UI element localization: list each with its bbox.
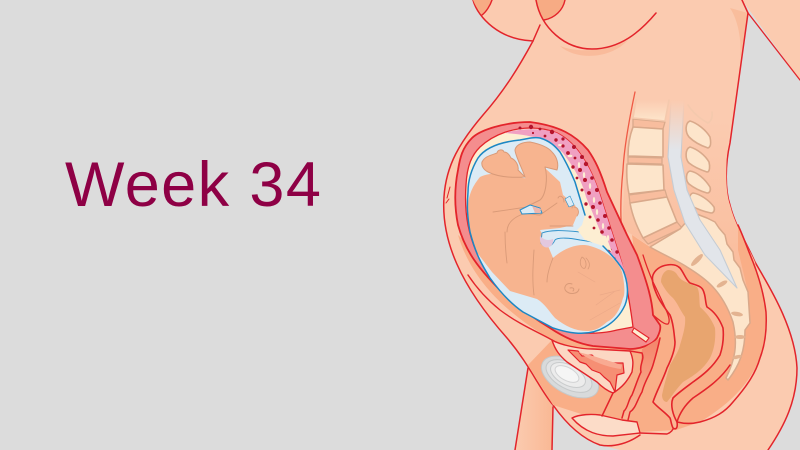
body silhouette [444,0,800,450]
abdominal wall band [458,235,600,350]
rectum [643,225,766,429]
uterus [455,122,660,349]
back shading [622,120,766,312]
spinal cord [668,100,737,288]
foot [482,150,525,177]
title: Week 34 [65,150,322,220]
thigh and upper foot [515,142,558,205]
bladder [552,340,633,416]
placenta pink band [505,129,625,272]
fluid pocket under arm [520,205,542,214]
sacrum [650,213,750,380]
uterine cavity (placenta base) [466,128,633,333]
amniotic membrane blue line [467,138,627,333]
torso and head [468,168,624,331]
discs [628,119,682,244]
spine [621,92,750,380]
ear [565,284,579,293]
sacral discs [690,253,746,360]
pelvic darker region [528,225,766,432]
abdominal wall line [468,275,552,340]
vagina and perineum [572,338,675,436]
cervix [632,328,649,342]
amniotic fluid [467,138,627,333]
fetus [468,142,624,331]
breast [473,0,656,56]
vertebra bodies [627,100,677,238]
placenta blood dots [518,125,619,261]
eye [580,257,589,269]
umbilical cord [540,231,612,252]
bowel contents [661,270,715,402]
placenta cream spots [558,144,609,241]
pubic bone [535,347,605,407]
spinous processes [686,105,714,213]
